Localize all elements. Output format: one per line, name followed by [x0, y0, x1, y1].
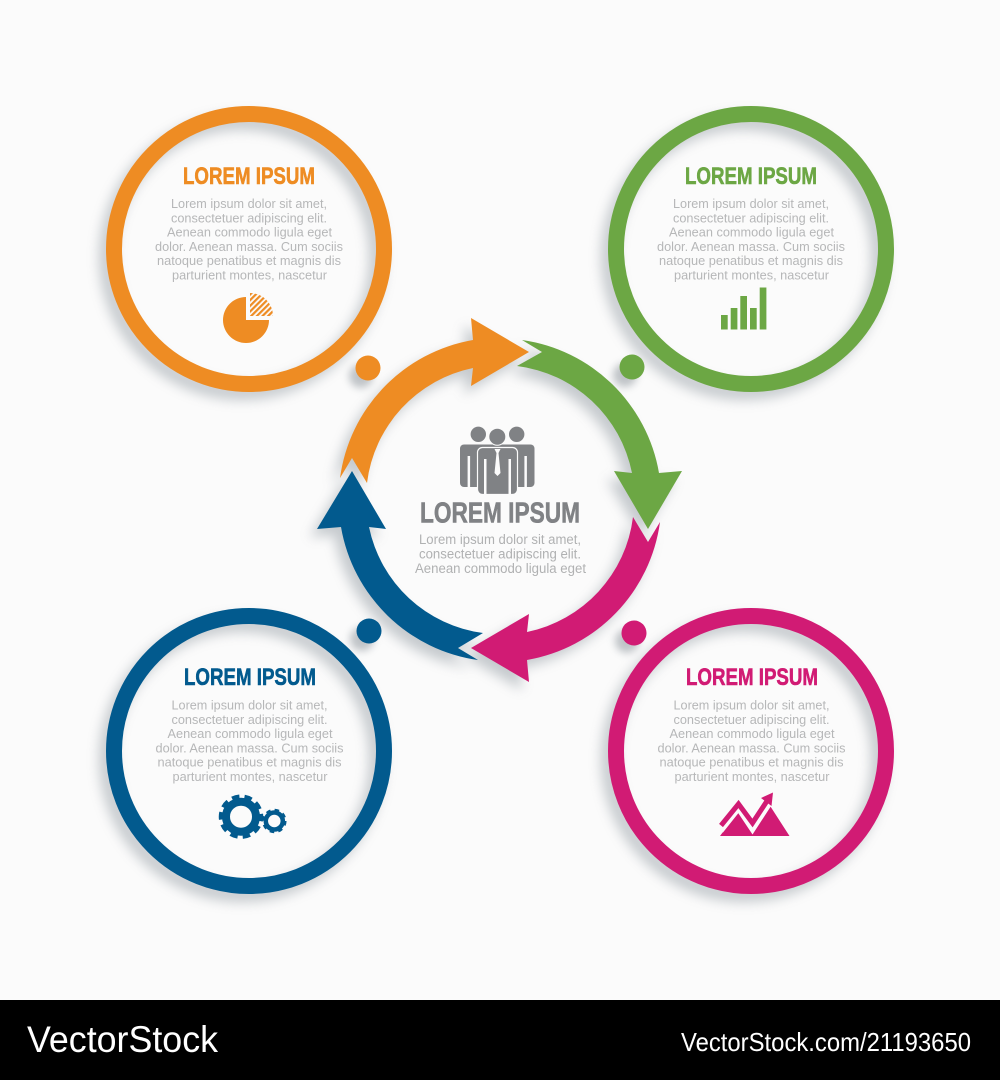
orange heading: LOREM IPSUM	[183, 163, 315, 190]
pink body text: consectetuer adipiscing elit.	[674, 713, 830, 727]
blue heading: LOREM IPSUM	[184, 664, 316, 691]
pink body text: natoque penatibus et magnis dis	[660, 756, 844, 770]
panel: green circle	[616, 114, 886, 384]
footer image id text: VectorStock.com/21193650	[681, 1027, 971, 1057]
dot: blue	[356, 618, 382, 644]
pink body text	[658, 698, 846, 784]
arrow: green	[517, 340, 682, 529]
panel: blue circle	[114, 616, 384, 886]
footer logo text: VectorStock	[27, 1019, 218, 1060]
dot: green	[620, 354, 644, 380]
green ring	[616, 114, 886, 384]
pink body text: parturient montes, nascetur	[674, 770, 830, 784]
center body text: Lorem ipsum dolor sit amet,	[419, 532, 581, 547]
orange body text: parturient montes, nascetur	[172, 268, 327, 282]
blue body text: dolor. Aenean massa. Cum sociis	[156, 741, 344, 755]
blue body text: Lorem ipsum dolor sit amet,	[172, 698, 328, 712]
footer bar	[0, 1000, 1000, 1080]
orange body text: consectetuer adipiscing elit.	[171, 211, 327, 225]
blue body text: Aenean commodo ligula eget	[168, 727, 333, 741]
green body text	[657, 197, 845, 282]
green body text: Aenean commodo ligula eget	[669, 226, 835, 240]
arrow: pink	[471, 517, 660, 682]
orange body text: Lorem ipsum dolor sit amet,	[171, 197, 327, 211]
green body text: Lorem ipsum dolor sit amet,	[673, 197, 829, 211]
icon: bar chart	[721, 288, 766, 330]
center body text: Aenean commodo ligula eget	[415, 561, 586, 576]
blue body text: consectetuer adipiscing elit.	[172, 713, 328, 727]
center body text: consectetuer adipiscing elit.	[419, 546, 581, 562]
orange body text	[155, 197, 343, 282]
icon: gears	[221, 797, 285, 837]
icon: mountain growth chart	[720, 792, 790, 836]
center heading: LOREM IPSUM	[420, 498, 580, 530]
orange body text: Aenean commodo ligula eget	[167, 226, 333, 240]
panel: orange circle	[114, 114, 384, 384]
orange body text: natoque penatibus et magnis dis	[157, 254, 341, 268]
green body text: natoque penatibus et magnis dis	[659, 254, 843, 268]
green heading: LOREM IPSUM	[685, 163, 817, 190]
arrow: blue	[317, 471, 483, 660]
pink body text: Aenean commodo ligula eget	[670, 727, 835, 741]
pink ring	[616, 616, 886, 886]
orange ring	[114, 114, 384, 384]
green body text: consectetuer adipiscing elit.	[673, 211, 829, 225]
center body text	[415, 532, 586, 576]
pink heading: LOREM IPSUM	[686, 664, 818, 691]
green body text: parturient montes, nascetur	[674, 268, 829, 282]
pink body text: dolor. Aenean massa. Cum sociis	[658, 741, 846, 755]
green body text: dolor. Aenean massa. Cum sociis	[657, 240, 845, 254]
blue body text: parturient montes, nascetur	[172, 770, 328, 784]
panel: pink circle	[616, 616, 886, 886]
icon: pie chart	[223, 293, 273, 343]
arrow: orange	[340, 318, 529, 483]
icon: group of people	[460, 427, 534, 495]
orange body text: dolor. Aenean massa. Cum sociis	[155, 240, 343, 254]
shadows of rings, dots and arrows	[107, 122, 879, 894]
dot: orange	[356, 356, 380, 380]
blue body text: natoque penatibus et magnis dis	[158, 756, 342, 770]
blue body text	[156, 698, 344, 784]
dot: pink	[622, 620, 646, 646]
pink body text: Lorem ipsum dolor sit amet,	[674, 698, 830, 712]
blue ring	[114, 616, 384, 886]
